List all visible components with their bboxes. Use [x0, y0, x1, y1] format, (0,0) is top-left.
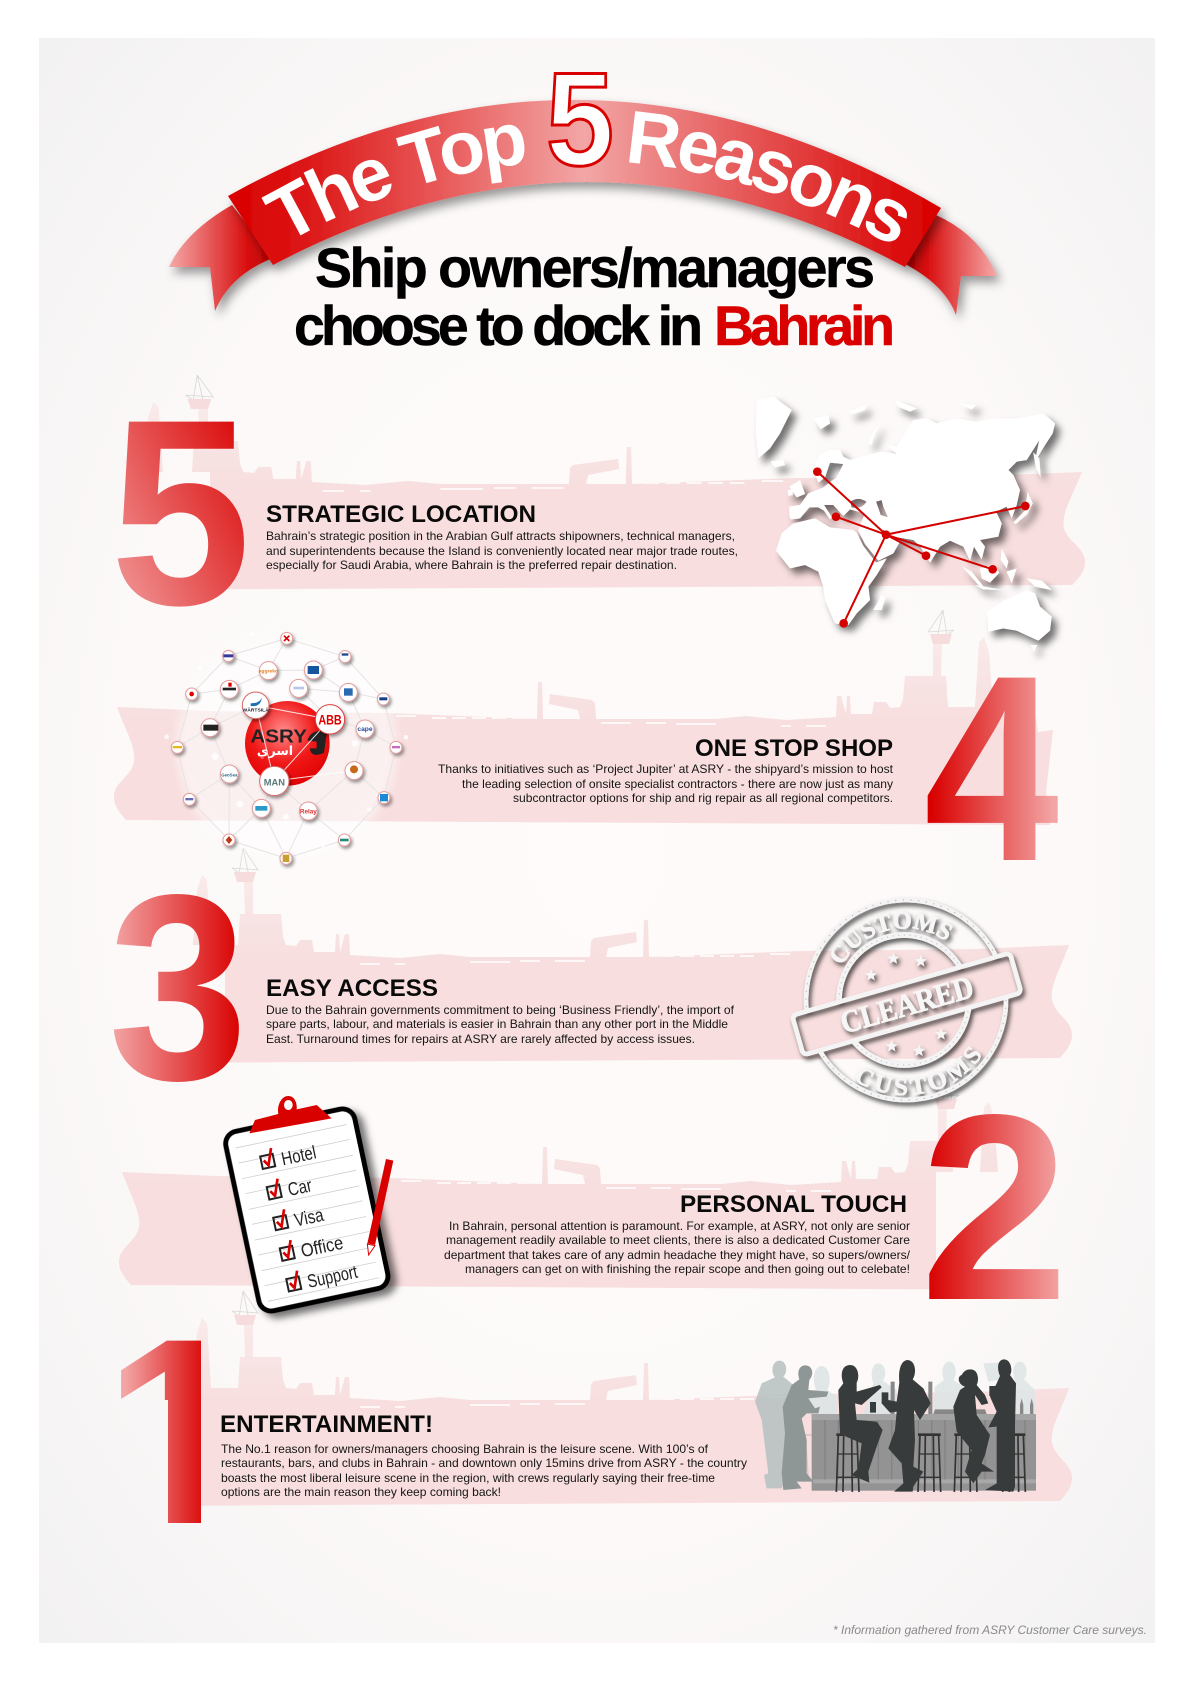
item hotel: Hotel: [279, 1141, 318, 1169]
beer taps: [891, 1382, 1033, 1414]
body: entertainment: The No.1 reason for owners/managers choosing Bahrain is the leisure scene. With 100’s of: [221, 1442, 709, 1456]
body: personal touch: management readily available to meet clients, there is also a dedicated Customer Care: [446, 1233, 910, 1247]
stamp band: [792, 953, 1021, 1055]
seated man: [838, 1365, 883, 1483]
body: personal touch: department that takes care of any admin headache they might have, so supers/owners/: [444, 1248, 911, 1262]
body: strategic location: especially for Saudi Arabia, where Bahrain is the preferred repair destination.: [266, 558, 677, 572]
clipboard body: [223, 1107, 390, 1313]
ribbon right tail: [905, 215, 997, 315]
body: strategic location: [266, 529, 738, 572]
stamp text top: CUSTOMS: [830, 912, 958, 970]
bar scene silhouettes: [755, 1359, 1036, 1492]
ship ribbon 3: [133, 848, 1072, 1063]
number 5: 5: [110, 365, 251, 661]
customs stamp: [790, 898, 1028, 1110]
bar counter: [812, 1382, 1036, 1491]
ribbon left tail: [169, 205, 273, 311]
number 1: 1: [103, 1284, 250, 1580]
standing man mid-grey: [782, 1365, 828, 1490]
logo marks: GeoSea: [221, 773, 238, 778]
faint dots: [164, 632, 408, 848]
body: easy access: Due to the Bahrain governments commitment to being ‘Business Friendly’, the import of: [266, 1003, 735, 1017]
white glow: [177, 638, 397, 858]
ship ribbon 4: [114, 610, 1053, 825]
checklist: [236, 1125, 379, 1301]
logo marks: aggreko: [259, 668, 278, 674]
body: easy access: East. Turnaround times for repairs at ASRY are rarely affected by access issues.: [266, 1032, 695, 1046]
body: easy access: spare parts, labour, and materials is easier in Bahrain than any other port in the Middle: [266, 1017, 728, 1031]
body: entertainment: [221, 1442, 747, 1499]
item car: [265, 1172, 314, 1204]
section 2 text: [444, 1191, 911, 1276]
number 2: 2: [920, 1060, 1069, 1356]
body: easy access: [266, 1003, 735, 1046]
body: one stop shop: Thanks to initiatives such as ‘Project Jupiter’ at ASRY - the shipyard’s mission to host: [438, 762, 894, 776]
item hotel: [259, 1139, 318, 1173]
continents: [756, 397, 1055, 652]
body: personal touch: managers can get on with finishing the repair scope and then going out to celebate!: [465, 1262, 910, 1276]
seated woman: [953, 1369, 994, 1483]
item office: Office: [299, 1232, 345, 1261]
ASRY helmet mark: [307, 731, 327, 755]
title ribbon: [169, 46, 1004, 321]
footnote: * Information gathered from ASRY Customer Care surveys.: [833, 1623, 1147, 1637]
logo marks: WÄRTSILÄ: [243, 707, 269, 714]
body: strategic location: Bahrain’s strategic position in the Arabian Gulf attracts shipowners, technical managers,: [266, 529, 735, 543]
body: strategic location: and superintendents because the Island is conveniently located near major trade routes,: [266, 544, 738, 558]
body: one stop shop: [438, 762, 894, 805]
subtitle highlight Bahrain: Bahrain: [714, 295, 895, 357]
ship ribbon 1: [133, 1291, 1072, 1506]
ribbon text: The Top: The Top: [262, 124, 524, 236]
body: entertainment: restaurants, bars, and clubs in Bahrain - and downtown only 15mins drive from ASRY - the country: [221, 1456, 747, 1470]
subtitle line 2: choose to dock in: [294, 295, 703, 357]
stamp stars: [865, 952, 947, 1056]
pencil: [367, 1159, 393, 1255]
shipping routes: [813, 467, 1030, 628]
clip: [249, 1096, 332, 1133]
item office: [278, 1229, 345, 1265]
ribbon arch: [228, 100, 941, 267]
heading: entertainment: ENTERTAINMENT!: [220, 1411, 433, 1438]
stamp word cleared: CLEARED: [836, 968, 977, 1040]
ribbon text: Reasons: Reasons: [629, 111, 907, 242]
heading: personal touch: PERSONAL TOUCH: [680, 1191, 907, 1218]
number 4: 4: [924, 621, 1061, 917]
logo nodes: [171, 632, 402, 864]
section 5 text: [266, 501, 738, 572]
ASRY sphere: [245, 701, 354, 786]
item visa: Visa: [292, 1204, 326, 1231]
checklist clipboard: [223, 1096, 393, 1313]
body: entertainment: boasts the most liberal leisure scene in the region, with crews regularly saying their free-time: [221, 1471, 715, 1485]
stools: [836, 1435, 1025, 1492]
body: one stop shop: the leading selection of onsite specialist contractors - there are now just as many: [462, 777, 893, 791]
standing man: [882, 1360, 931, 1492]
sphere links: [256, 705, 354, 781]
ribbon big number 5: 5: [546, 46, 614, 194]
section 1 text: [220, 1411, 747, 1499]
tall man: [985, 1359, 1016, 1492]
world map with routes: [756, 397, 1055, 652]
item car: Car: [286, 1174, 314, 1200]
logo marks: Relay: [300, 808, 317, 815]
stamp text bottom: CUSTOMS: [855, 1046, 986, 1098]
contractor network: [164, 632, 408, 864]
body: personal touch: In Bahrain, personal attention is paramount. For example, at ASRY, not only are senior: [449, 1219, 910, 1233]
logo marks: ABB: [318, 712, 342, 728]
standing man pale: [755, 1361, 795, 1488]
network links: [177, 638, 396, 858]
heading: easy access: EASY ACCESS: [266, 975, 438, 1002]
Arabic wordmark: اسري: [257, 743, 293, 758]
body: entertainment: options are the main reason they keep coming back!: [221, 1485, 501, 1499]
body: personal touch: [444, 1219, 911, 1276]
ASRY wordmark: ASRY: [250, 726, 308, 747]
section 3 text: [266, 975, 735, 1046]
background crowd: [808, 1362, 1035, 1414]
item support: [285, 1258, 360, 1296]
glasses: [870, 1386, 996, 1413]
logo marks: [173, 636, 400, 862]
ship ribbon 2: [119, 1075, 1058, 1290]
subtitle line 1: Ship owners/managers: [315, 237, 875, 299]
section 4 text: [438, 735, 894, 805]
item visa: [272, 1201, 326, 1235]
heading: strategic location: STRATEGIC LOCATION: [266, 501, 536, 528]
subtitle: [294, 237, 895, 357]
heading: one stop shop: ONE STOP SHOP: [695, 735, 893, 762]
stamp rings: [806, 900, 1006, 1100]
foreground figures: [838, 1359, 1016, 1492]
logo marks: cape: [357, 726, 373, 733]
item support: Support: [305, 1261, 360, 1292]
ruled lines: [236, 1125, 379, 1301]
logo marks: MAN: [264, 778, 285, 788]
body: one stop shop: subcontractor options for ship and rig repair as all regional competitors.: [513, 791, 893, 805]
stool pale: [798, 1435, 813, 1480]
number 3: 3: [108, 840, 248, 1136]
ship ribbon 5: [79, 375, 1085, 590]
